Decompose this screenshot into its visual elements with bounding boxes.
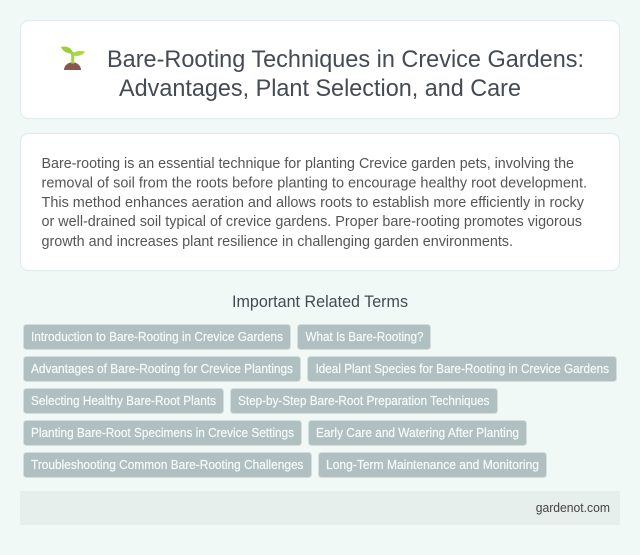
tag: Early Care and Watering After Planting	[316, 426, 519, 440]
footer: gardenot.com	[536, 501, 610, 515]
tag	[308, 356, 616, 382]
text block: description	[42, 156, 587, 250]
tag	[24, 388, 224, 414]
tag: Ideal Plant Species for Bare-Rooting in Crevice Gardens	[316, 362, 609, 376]
panel: description	[20, 134, 620, 270]
tag: What Is Bare-Rooting?	[306, 330, 424, 344]
text block: description: growth and increases plant resilience in challenging garden environments.	[42, 234, 513, 250]
heading: related terms: Important Related Terms	[232, 293, 408, 311]
tag: Planting Bare-Root Specimens in Crevice Settings	[31, 426, 294, 440]
panel: title card	[20, 20, 620, 118]
tag: Long-Term Maintenance and Monitoring	[326, 458, 539, 472]
title	[107, 46, 584, 102]
tag: Selecting Healthy Bare-Root Plants	[31, 394, 216, 408]
text block: description: or well-drained soil typical of crevice gardens. Proper bare-rooting promotes vigorous	[42, 214, 582, 230]
icon: seedling	[61, 47, 85, 70]
tag	[230, 388, 498, 414]
tag: Introduction to Bare-Rooting in Crevice Gardens	[31, 330, 283, 344]
tag	[24, 452, 312, 478]
title: Bare-Rooting Techniques in Crevice Gardens:	[107, 46, 584, 73]
text block: description: removal of soil from the roots before planting to encourage healthy root development.	[42, 176, 587, 192]
tag: Step-by-Step Bare-Root Preparation Techniques	[238, 394, 490, 408]
tag: Troubleshooting Common Bare-Rooting Challenges	[31, 458, 304, 472]
tag list	[24, 324, 616, 478]
text block: description: This method enhances aeration and allows roots to establish more efficiently in rocky	[42, 195, 585, 211]
tag: Advantages of Bare-Rooting for Crevice Plantings	[31, 362, 293, 376]
tag	[24, 420, 302, 446]
tag	[24, 356, 300, 382]
title: Advantages, Plant Selection, and Care	[119, 75, 521, 102]
tag	[318, 452, 546, 478]
footer	[20, 491, 620, 525]
text block: description: Bare-rooting is an essential technique for planting Crevice garden pets, involving the	[42, 156, 574, 172]
tag	[24, 324, 290, 350]
tag	[308, 420, 526, 446]
tag	[298, 324, 430, 350]
